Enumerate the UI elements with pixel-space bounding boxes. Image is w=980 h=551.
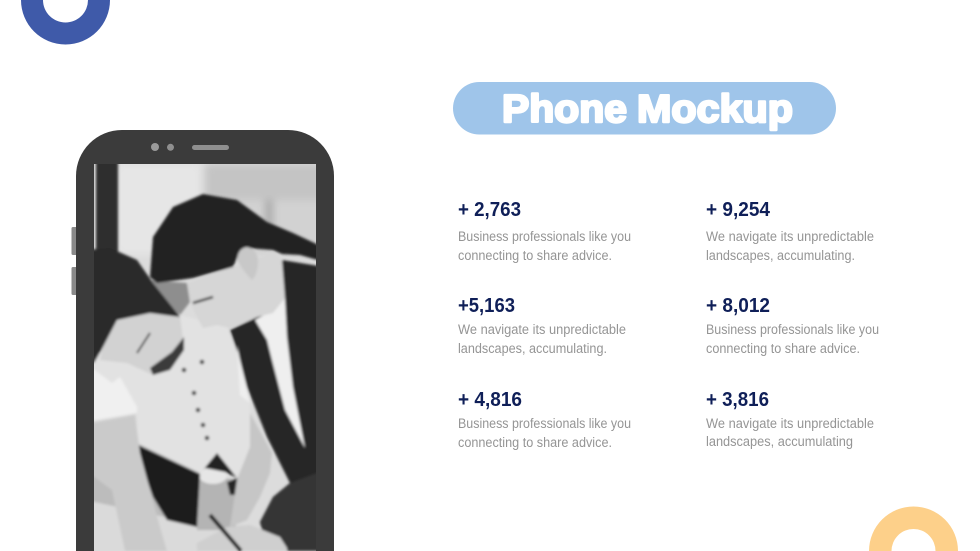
hands xyxy=(197,525,287,551)
man's belly xyxy=(199,468,227,484)
woman's hair xyxy=(150,194,325,283)
stat: 4,816 xyxy=(458,389,631,450)
ear xyxy=(237,247,258,280)
man's trousers xyxy=(138,445,200,527)
phone side buttons xyxy=(72,227,78,295)
stat: 3,816: landscapes, accumulating xyxy=(706,434,853,449)
phone body xyxy=(76,130,334,551)
man's forehead patch xyxy=(150,280,190,315)
stat: 8,012: + 8,012 xyxy=(706,295,770,317)
small shirt sleeve xyxy=(237,345,250,403)
stat: 3,816: + 3,816 xyxy=(706,389,769,411)
title pill xyxy=(453,82,836,134)
phone mockup xyxy=(72,130,334,551)
man's right arm xyxy=(230,413,272,527)
man's face xyxy=(100,313,184,375)
woman's eye xyxy=(193,297,213,303)
shirt buttons xyxy=(182,360,209,440)
woman's face and neck xyxy=(187,253,285,328)
stat: 2,763 xyxy=(458,199,631,263)
man's eye xyxy=(137,333,150,353)
stat: 8,012: connecting to share advice. xyxy=(706,341,860,356)
stat: 2,763: connecting to share advice. xyxy=(458,248,612,263)
man's left arm xyxy=(94,416,166,551)
decorative blue ring xyxy=(21,0,110,44)
desk and papers xyxy=(94,444,199,517)
title xyxy=(502,88,793,131)
stat: 4,816: connecting to share advice. xyxy=(458,435,612,450)
stat: 9,254 xyxy=(706,199,874,263)
stat: 2,763: + 2,763 xyxy=(458,199,521,221)
camera and speaker xyxy=(151,143,229,151)
man's beard xyxy=(150,337,184,375)
man's shirt xyxy=(94,330,247,478)
woman's white shirt xyxy=(255,298,305,448)
stat: 4,816: + 4,816 xyxy=(458,389,522,411)
stat: 9,254: landscapes, accumulating. xyxy=(706,248,855,263)
title: Phone xyxy=(502,88,627,131)
stat: 5,163: We navigate its unpredictable xyxy=(458,322,626,337)
photo: two colleagues leaning over a desk xyxy=(85,160,325,551)
pen xyxy=(210,515,241,551)
man's hair xyxy=(85,248,180,363)
stat: 2,763: Business professionals like you xyxy=(458,229,631,244)
decorative orange ring xyxy=(869,507,958,551)
stat: 5,163: landscapes, accumulating. xyxy=(458,341,607,356)
woman's jacket xyxy=(229,258,316,528)
stat: 8,012: Business professionals like you xyxy=(706,322,879,337)
stat: 4,816: Business professionals like you xyxy=(458,416,631,431)
stat: 3,816: We navigate its unpredictable xyxy=(706,416,874,431)
stat: 5,163 xyxy=(458,295,626,356)
stat: 9,254: We navigate its unpredictable xyxy=(706,229,874,244)
man's sleeve xyxy=(94,370,136,420)
title: Mockup xyxy=(637,88,793,131)
stat: 8,012 xyxy=(706,295,879,356)
stat: 5,163: +5,163 xyxy=(458,295,515,317)
stat: 3,816 xyxy=(706,389,874,449)
stat: 9,254: + 9,254 xyxy=(706,199,771,221)
